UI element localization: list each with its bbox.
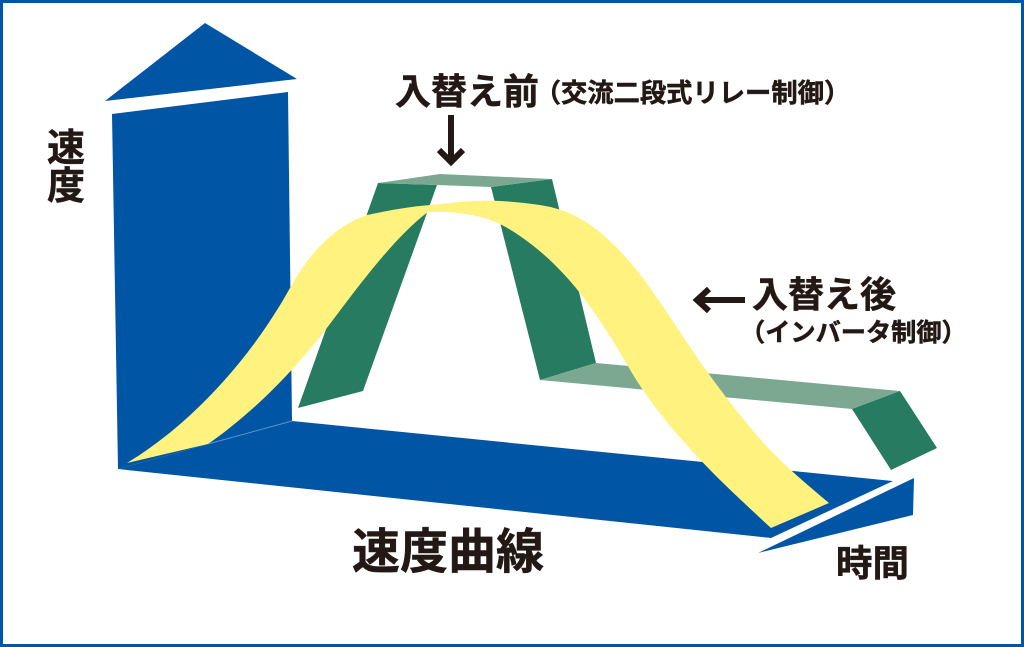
- arrow: down to green ribbon: [439, 115, 463, 162]
- label: velocity: 速: [47, 128, 85, 170]
- arrow: left to yellow ribbon: [697, 289, 745, 311]
- label: before replacement: 入替え前: [395, 71, 539, 112]
- label: after replacement control type: （インバータ制御）: [740, 319, 967, 347]
- label: velocity: [47, 128, 85, 208]
- label: time: 時間: [836, 543, 909, 584]
- title: speed curve: 速度曲線: [352, 526, 544, 579]
- time axis: floor and arrow: [118, 421, 914, 553]
- label: velocity: 度: [47, 166, 85, 208]
- label: after replacement: 入替え後: [752, 274, 896, 315]
- label: before replacement control type: （交流二段式リレー制御）: [535, 78, 850, 108]
- floor highlight line: [208, 421, 292, 444]
- before-replacement speed curve: green stepped ribbon: [298, 174, 937, 470]
- velocity axis: wall and up arrow: [105, 23, 297, 469]
- after-replacement speed curve: yellow ribbon: [127, 201, 829, 528]
